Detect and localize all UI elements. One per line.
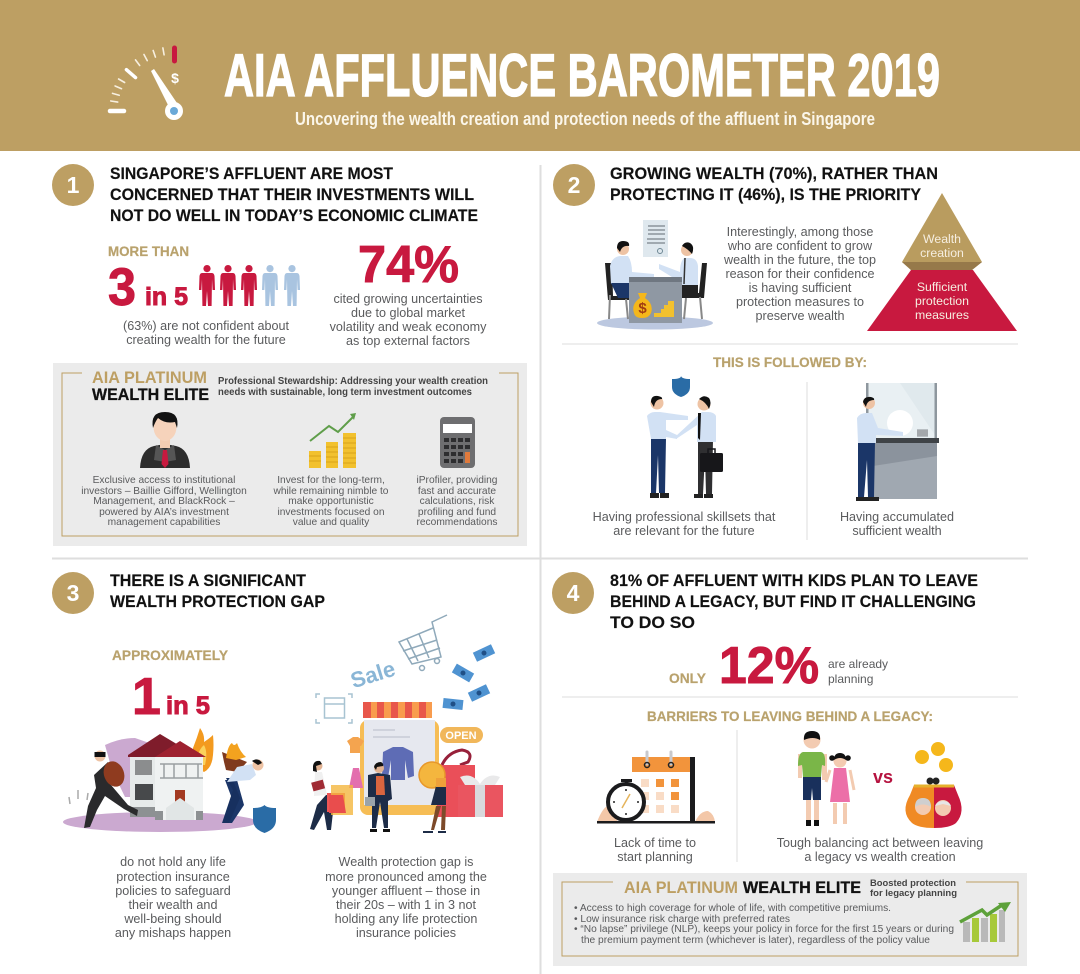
icon: calculator — [440, 417, 475, 468]
icon: coins and purse — [905, 742, 962, 828]
text: 74% description: due to global market — [351, 306, 466, 320]
text: lack of time: Lack of time to — [614, 836, 696, 850]
text: accumulated wealth: sufficient wealth — [852, 524, 942, 538]
text: institutional investors: Exclusive access to institutional — [93, 475, 235, 486]
text: institutional investors: Management, and BlackRock – — [93, 496, 235, 507]
number badge 1 — [52, 164, 94, 206]
heading 2: PROTECTING IT (46%), IS THE PRIORITY — [610, 186, 921, 204]
heading 4: 81% OF AFFLUENT WITH KIDS PLAN TO LEAVE — [610, 572, 978, 590]
subheading: barriers: BARRIERS TO LEAVING BEHIND A LEGACY: — [647, 709, 933, 724]
text: invest long term: value and quality — [293, 517, 370, 528]
text: iProfiler: calculations, risk — [420, 496, 495, 507]
text: 1 in 5 description: their wealth and — [129, 898, 217, 912]
text: interestingly: Interestingly, among those — [727, 225, 873, 239]
text: professional skillsets: are relevant for the future — [613, 524, 755, 538]
text: iProfiler: fast and accurate — [418, 486, 496, 497]
stat: 74%: 74% — [358, 236, 459, 294]
money bag: $ — [638, 300, 647, 317]
label: sale: Sale — [348, 656, 398, 693]
icon: calendar and stopwatch — [597, 752, 715, 824]
stat: only 12%: ONLY — [669, 671, 706, 686]
panel tagline: Boosted protection — [870, 878, 956, 889]
header banner — [0, 0, 1080, 151]
text: accumulated wealth: Having accumulated — [840, 510, 954, 524]
right man — [676, 396, 716, 498]
pyramid — [867, 193, 1017, 331]
text: interestingly: protection measures to — [736, 295, 864, 309]
illustration: handshake — [647, 376, 723, 498]
left woman — [310, 761, 353, 830]
number badge 1: 1 — [67, 172, 80, 198]
stat: only 12%: are already — [828, 657, 888, 671]
illustration: shopping scene — [310, 615, 503, 833]
icon: cart — [399, 615, 447, 670]
benefits list — [574, 903, 954, 946]
text: 1 in 5 description: protection insurance — [116, 870, 230, 884]
panel heading: WEALTH ELITE — [743, 879, 861, 897]
text: balancing act: Tough balancing act between leaving — [777, 836, 983, 850]
left man — [647, 396, 688, 498]
text: 63% not confident — [123, 319, 289, 347]
icon: growth chart with coins — [309, 413, 356, 468]
pyramid label: protection: Sufficient — [917, 280, 968, 294]
text: 1 in 5 description: policies to safeguard — [115, 884, 231, 898]
panel description: Professional Stewardship: Addressing your wealth creation — [218, 376, 488, 387]
coin stacks — [654, 301, 674, 317]
left person — [605, 241, 654, 319]
text: 63% not confident: (63%) are not confident about — [123, 319, 289, 333]
shop — [347, 702, 483, 815]
text: 1 in 5 description: do not hold any life — [120, 855, 226, 869]
heading 1 — [110, 165, 478, 225]
icon: two children — [798, 731, 854, 826]
text: iProfiler: profiling and fund — [418, 507, 496, 518]
desk — [629, 277, 682, 323]
thief — [69, 750, 138, 828]
number badge 3: 3 — [67, 580, 79, 606]
text: 74% description — [330, 292, 487, 348]
man in suit — [365, 762, 392, 832]
text: invest long term: investments focused on — [277, 507, 385, 518]
benefits list: • Access to high coverage for whole of life, with competitive premiums. — [574, 903, 891, 914]
open sign: OPEN — [445, 730, 477, 742]
stat: only 12%: 12% — [719, 637, 819, 695]
subheading: followed by: THIS IS FOLLOWED BY: — [713, 355, 867, 370]
icon: bar chart with arrow — [960, 902, 1011, 942]
text: lack of time — [614, 836, 696, 864]
text: institutional investors: powered by AIA’s investment — [99, 507, 229, 518]
pyramid label: protection: protection — [915, 294, 969, 308]
icon: gauge — [110, 48, 182, 118]
number badge 3 — [52, 572, 94, 614]
panel heading — [92, 369, 209, 404]
text: professional skillsets — [593, 510, 776, 538]
man with burning jacket — [222, 743, 264, 823]
panel: section 3 — [52, 572, 503, 940]
panel tagline: for legacy planning — [870, 888, 957, 899]
text: 1 in 5 description: well-being should — [123, 912, 222, 926]
text: balancing act — [777, 836, 983, 864]
subtitle: Uncovering the wealth creation and protection needs of the affluent in Singapore — [295, 109, 875, 129]
panel description — [218, 376, 488, 398]
stat: more than 3 in 5 — [108, 244, 189, 317]
stat: approximately 1 in 5: 1 — [132, 668, 161, 726]
text: invest long term: make opportunistic — [288, 496, 374, 507]
panel tagline — [870, 878, 957, 899]
text: 74% description: cited growing uncertainties — [333, 292, 483, 306]
number badge 4: 4 — [567, 580, 580, 606]
icon: window frame — [316, 694, 352, 723]
woman with coin — [423, 778, 446, 833]
text: invest long term — [273, 475, 389, 528]
text: younger affluent: more pronounced among the — [325, 870, 487, 884]
heading 2: GROWING WEALTH (70%), RATHER THAN — [610, 165, 938, 183]
text: interestingly: reason for their confidence — [725, 267, 875, 281]
illustration: two people at a desk — [597, 220, 713, 330]
icon: shield — [253, 805, 276, 833]
stat: more than 3 in 5: 3 — [108, 258, 136, 317]
text: younger affluent: younger affluent – those in — [332, 884, 480, 898]
text: professional skillsets: Having professional skillsets that — [593, 510, 776, 524]
text: younger affluent: their 20s – with 1 in 3 not — [336, 898, 477, 912]
heading 3: WEALTH PROTECTION GAP — [110, 593, 325, 611]
panel: AIA Platinum Wealth Elite legacy — [553, 873, 1027, 966]
panel: section 4 — [552, 572, 1027, 966]
icon: row of five people — [199, 265, 300, 306]
panel: section 2 — [553, 164, 1018, 540]
stat: approximately 1 in 5: APPROXIMATELY — [112, 648, 228, 663]
heading 1: NOT DO WELL IN TODAY’S ECONOMIC CLIMATE — [110, 207, 478, 225]
panel heading — [624, 879, 861, 897]
text: interestingly — [723, 225, 876, 323]
text: interestingly: preserve wealth — [756, 309, 844, 323]
panel heading: AIA PLATINUM — [624, 879, 738, 897]
stat: more than 3 in 5: in 5 — [145, 283, 188, 311]
heading 3: THERE IS A SIGNIFICANT — [110, 572, 306, 590]
pyramid label: wealth creation: Wealth — [923, 232, 961, 246]
text: 74% description: as top external factors — [346, 334, 470, 348]
text: younger affluent — [325, 855, 487, 940]
pyramid label: protection — [915, 280, 969, 322]
panel heading: AIA PLATINUM — [92, 369, 207, 387]
heading 1: CONCERNED THAT THEIR INVESTMENTS WILL — [110, 186, 474, 204]
number badge 2: 2 — [568, 172, 580, 198]
pyramid label: wealth creation — [920, 232, 964, 260]
icon: businessman — [140, 412, 190, 468]
benefits list: the premium payment term (whichever is later), regardless of the policy value — [581, 935, 930, 946]
briefcase — [700, 453, 723, 472]
text: interestingly: wealth in the future, the top — [723, 253, 876, 267]
gifts — [437, 750, 503, 817]
illustration: bank counter — [856, 383, 939, 501]
heading 1: SINGAPORE’S AFFLUENT ARE MOST — [110, 165, 393, 183]
number badge 4 — [552, 572, 594, 614]
pyramid label: protection: measures — [915, 308, 969, 322]
text: institutional investors — [81, 475, 247, 528]
text: younger affluent: holding any life protection — [335, 912, 477, 926]
benefits list: • “No lapse” privilege (NLP), keeps your policy in force for the first 15 years or during — [574, 924, 954, 935]
text: iProfiler: iProfiler, providing — [417, 475, 498, 486]
text: accumulated wealth — [840, 510, 954, 538]
panel: section 1 — [52, 164, 527, 546]
illustration: house with thief and fire — [63, 728, 276, 833]
number badge 2 — [553, 164, 595, 206]
customer — [856, 397, 903, 501]
stat: approximately 1 in 5: in 5 — [166, 692, 210, 720]
panel: AIA Platinum Wealth Elite — [53, 363, 527, 546]
icon: shield — [672, 376, 690, 397]
label: vs: vs — [873, 767, 893, 787]
text: invest long term: while remaining nimble to — [273, 486, 389, 497]
icon: dollar sign: $ — [171, 70, 179, 86]
text: 63% not confident: creating wealth for the future — [126, 333, 286, 347]
text: invest long term: Invest for the long-term, — [277, 475, 385, 486]
stat: only 12%: planning — [828, 672, 873, 686]
panel heading: WEALTH ELITE — [92, 385, 209, 404]
text: 74% description: volatility and weak economy — [330, 320, 487, 334]
right person — [659, 242, 707, 319]
benefits list: • Low insurance risk charge with preferred rates — [574, 914, 790, 925]
text: 1 in 5 description: any mishaps happen — [115, 926, 231, 940]
text: institutional investors: management capabilities — [108, 517, 220, 528]
text: interestingly: who are confident to grow — [727, 239, 873, 253]
heading 3 — [110, 572, 325, 611]
text: iProfiler — [417, 475, 498, 528]
text: lack of time: start planning — [617, 850, 693, 864]
heading 2 — [610, 165, 938, 204]
stat: more than 3 in 5: MORE THAN — [108, 244, 189, 259]
text: iProfiler: recommendations — [417, 517, 497, 528]
heading 4 — [610, 572, 978, 632]
text: balancing act: a legacy vs wealth creation — [804, 850, 956, 864]
icon: banknotes — [443, 644, 495, 710]
text: younger affluent: insurance policies — [356, 926, 456, 940]
text: 1 in 5 description — [115, 855, 231, 940]
text: institutional investors: investors – Baillie Gifford, Wellington — [81, 486, 247, 497]
stat: only 12% — [669, 637, 888, 695]
heading 4: TO DO SO — [610, 614, 695, 632]
heading 4: BEHIND A LEGACY, BUT FIND IT CHALLENGING — [610, 593, 976, 611]
stat: approximately 1 in 5 — [112, 648, 228, 726]
panel description: needs with sustainable, long term investment outcomes — [218, 387, 472, 398]
text: younger affluent: Wealth protection gap is — [339, 855, 473, 869]
text: interestingly: is having sufficient — [749, 281, 852, 295]
coin — [419, 762, 445, 788]
pyramid label: wealth creation: creation — [920, 246, 964, 260]
